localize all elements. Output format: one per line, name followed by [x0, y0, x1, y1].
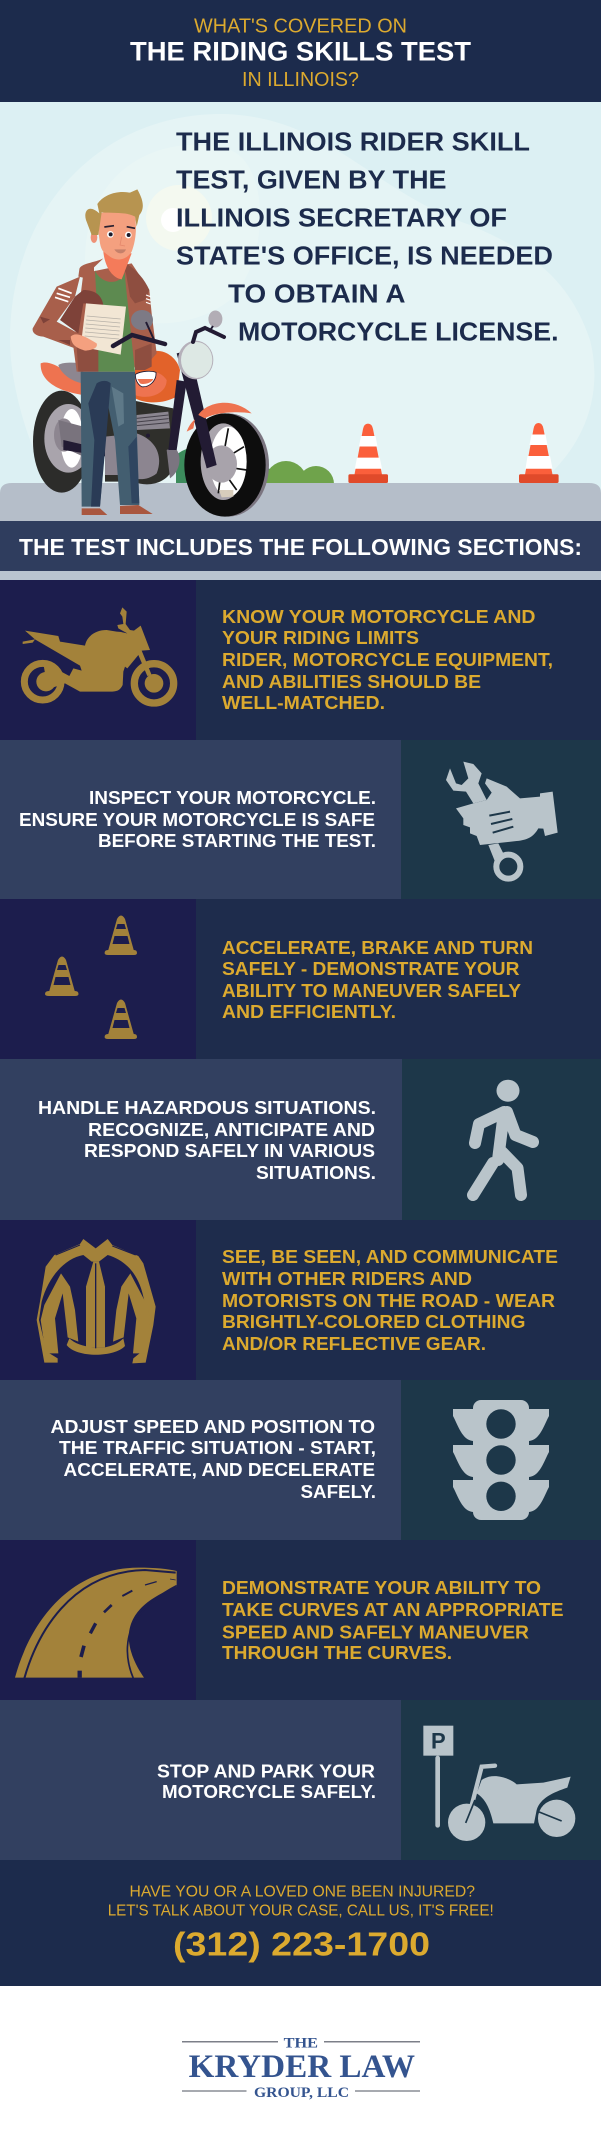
text: handle hazardous situations — [38, 1097, 376, 1183]
panel: section 2 — [0, 740, 601, 899]
text: see be seen: AND/OR REFLECTIVE GEAR. — [222, 1333, 486, 1354]
icon: parking sign and motorcycle: P — [431, 1729, 446, 1754]
intro text: MOTORCYCLE LICENSE. — [238, 316, 558, 346]
logo: Kryder Law Group: THE — [284, 2036, 318, 2052]
call to action: HAVE YOU OR A LOVED ONE BEEN INJURED? — [130, 1884, 475, 1900]
text: see be seen: MOTORISTS ON THE ROAD - WEAR — [222, 1290, 555, 1311]
panel: section 3 — [0, 899, 601, 1059]
panel: section 4 — [0, 1059, 601, 1220]
panel: section 6 — [0, 1380, 601, 1540]
intro text: ILLINOIS SECRETARY OF — [176, 202, 507, 232]
rider jacket — [33, 258, 157, 372]
text: inspect your motorcycle: INSPECT YOUR MOTORCYCLE. — [89, 787, 376, 808]
text: adjust speed and position: ACCELERATE, AND DECELERATE — [64, 1459, 375, 1480]
call to action: (312) 223-1700 — [173, 1926, 430, 1963]
text: demonstrate curves: THROUGH THE CURVES. — [222, 1642, 452, 1663]
icon: curved road — [15, 1568, 177, 1678]
text: know your motorcycle: WELL-MATCHED. — [222, 692, 385, 713]
text: adjust speed and position: ADJUST SPEED AND POSITION TO — [50, 1416, 375, 1437]
text: know your motorcycle: AND ABILITIES SHOULD BE — [222, 671, 481, 692]
text: demonstrate curves: SPEED AND SAFELY MANEUVER — [222, 1622, 529, 1642]
intro text: TO OBTAIN A — [228, 279, 406, 309]
logo: Kryder Law Group: GROUP, LLC — [254, 2085, 349, 2101]
icon: motorcycle silhouette — [17, 607, 174, 703]
text: see be seen: BRIGHTLY-COLORED CLOTHING — [222, 1311, 526, 1332]
icon: traffic cone right — [519, 423, 559, 483]
text: know your motorcycle — [222, 606, 553, 713]
intro text — [176, 127, 558, 346]
icon: walking person — [473, 1080, 533, 1195]
text: handle hazardous situations: RESPOND SAFELY IN VARIOUS — [84, 1140, 375, 1161]
banner: sections heading — [0, 521, 601, 571]
illustration: handlebars and mirrors — [113, 310, 224, 346]
text: know your motorcycle: KNOW YOUR MOTORCYCLE AND — [222, 606, 536, 627]
rider hand — [71, 334, 97, 351]
text: accelerate brake and turn: ABILITY TO MANEUVER SAFELY — [222, 980, 521, 1001]
text: inspect your motorcycle: BEFORE STARTING THE TEST. — [98, 830, 376, 851]
rider trousers — [81, 372, 139, 507]
icon: traffic light — [453, 1400, 549, 1520]
text: see be seen — [222, 1246, 558, 1354]
header: title: WHAT'S COVERED ON — [194, 14, 407, 38]
icon: traffic cone left — [348, 424, 388, 483]
text: demonstrate curves: TAKE CURVES AT AN APPROPRIATE — [222, 1599, 564, 1620]
text: accelerate brake and turn — [222, 937, 533, 1022]
call to action — [0, 1860, 601, 1986]
logo: Kryder Law Group — [182, 2036, 420, 2101]
header: title: IN ILLINOIS? — [242, 69, 359, 91]
text: handle hazardous situations: SITUATIONS. — [256, 1162, 376, 1183]
text: stop and park: MOTORCYCLE SAFELY. — [162, 1781, 376, 1802]
rider shoes — [82, 505, 153, 515]
logo: Kryder Law Group: KRYDER LAW — [189, 2049, 415, 2085]
text: demonstrate curves: DEMONSTRATE YOUR ABILITY TO — [222, 1577, 541, 1598]
text: stop and park — [157, 1760, 376, 1802]
icon: parking sign and motorcycle — [423, 1726, 575, 1841]
illustration: motorcycle rear — [33, 351, 180, 493]
text: adjust speed and position — [50, 1416, 376, 1502]
text: know your motorcycle: YOUR RIDING LIMITS — [222, 627, 419, 648]
panel: hero scene — [0, 102, 601, 521]
text: accelerate brake and turn: ACCELERATE, BRAKE AND TURN — [222, 937, 533, 958]
icon: hand with wrench — [446, 762, 558, 879]
text: know your motorcycle: RIDER, MOTORCYCLE EQUIPMENT, — [222, 649, 553, 670]
illustration: motorcycle front — [168, 341, 269, 517]
sun — [146, 185, 212, 251]
text: inspect your motorcycle — [19, 787, 376, 851]
icon: riding jacket — [37, 1239, 156, 1363]
call to action: LET'S TALK ABOUT YOUR CASE, CALL US, IT'S FREE! — [108, 1903, 494, 1920]
panel: section 7 — [0, 1540, 601, 1700]
panel: section 5 — [0, 1220, 601, 1380]
bushes — [176, 446, 340, 503]
text: see be seen: WITH OTHER RIDERS AND — [222, 1268, 472, 1289]
text: demonstrate curves — [222, 1577, 564, 1663]
panel: section 8 — [0, 1700, 601, 1860]
text: adjust speed and position: THE TRAFFIC SITUATION - START, — [59, 1437, 376, 1458]
header: title — [0, 0, 601, 102]
banner: sections heading: THE TEST INCLUDES THE FOLLOWING SECTIONS: — [19, 534, 582, 560]
text: handle hazardous situations: RECOGNIZE, ANTICIPATE AND — [88, 1119, 375, 1140]
icon: three cones — [45, 916, 137, 1039]
text: handle hazardous situations: HANDLE HAZARDOUS SITUATIONS. — [38, 1097, 376, 1118]
text: accelerate brake and turn: AND EFFICIENTLY. — [222, 1001, 396, 1022]
intro text: TEST, GIVEN BY THE — [176, 165, 446, 195]
intro text: STATE'S OFFICE, IS NEEDED — [176, 240, 553, 270]
text: accelerate brake and turn: SAFELY - DEMONSTRATE YOUR — [222, 958, 520, 979]
text: inspect your motorcycle: ENSURE YOUR MOTORCYCLE IS SAFE — [19, 809, 375, 830]
header: title: THE RIDING SKILLS TEST — [130, 37, 472, 67]
illustration: rider — [33, 189, 157, 515]
rider neck and head — [85, 189, 143, 279]
text: adjust speed and position: SAFELY. — [300, 1481, 376, 1502]
text: see be seen: SEE, BE SEEN, AND COMMUNICATE — [222, 1246, 558, 1267]
text: stop and park: STOP AND PARK YOUR — [157, 1760, 375, 1782]
intro text: THE ILLINOIS RIDER SKILL — [176, 127, 530, 157]
road — [0, 483, 601, 521]
rider paper — [81, 303, 126, 355]
panel: section 1 — [0, 580, 601, 740]
